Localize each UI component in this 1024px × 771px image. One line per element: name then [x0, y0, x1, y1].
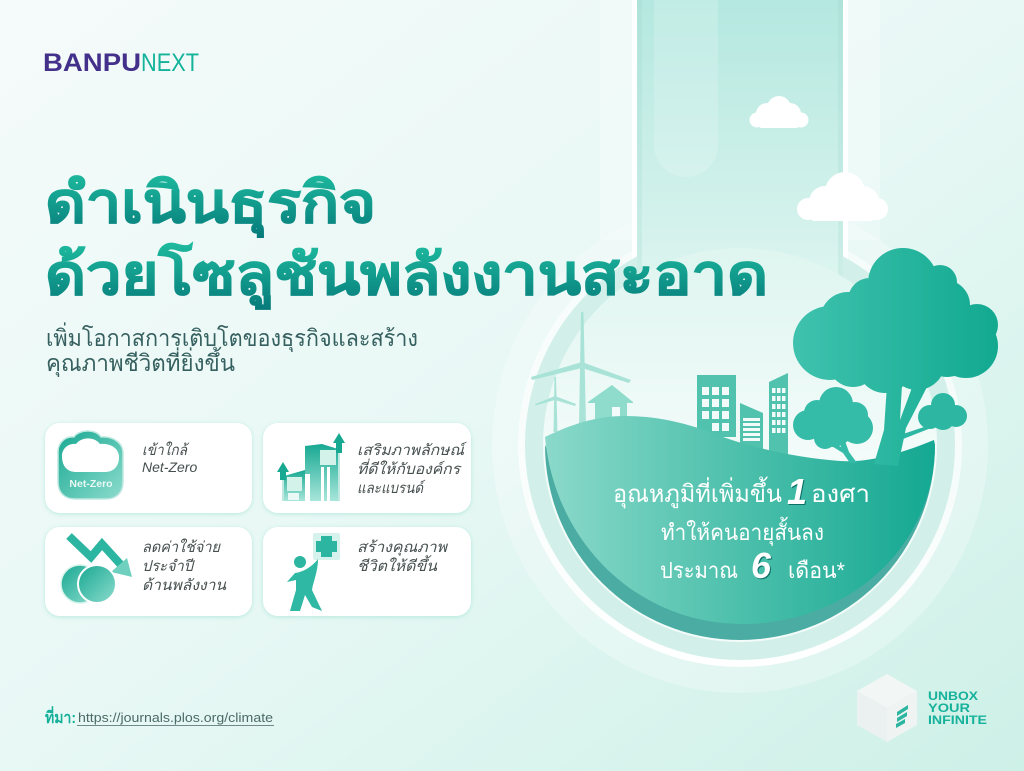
line 3: ประมาณ [660, 558, 738, 583]
text [142, 538, 227, 594]
cloud large [797, 172, 888, 221]
text: ด้านพลังงาน [142, 577, 227, 594]
line 1: 1 [787, 471, 807, 512]
flask: outer glow [492, 0, 988, 693]
flask: pale inner wall [525, 0, 955, 660]
icon: cube [857, 674, 917, 742]
text: ชีวิตให้ดีขึ้น [357, 555, 438, 575]
panel: quality of life [263, 527, 471, 616]
line 3 [660, 545, 845, 587]
tagline: UNBOX [928, 689, 978, 703]
text [357, 441, 467, 497]
hill shadow [545, 445, 935, 640]
icon: person with plus [287, 533, 340, 611]
panel: brand image [263, 423, 471, 513]
line 1 [613, 471, 870, 513]
big tree [793, 248, 998, 466]
text: และแบรนด์ [357, 479, 426, 497]
text: ที่ดีให้กับองค์กร [357, 458, 462, 478]
flask: bulb interior [543, 248, 937, 642]
line 3: เดือน* [788, 558, 845, 583]
icon: falling arrow and coins [61, 536, 132, 603]
unbox badge [857, 674, 987, 742]
icon: buildings with arrows [277, 433, 345, 501]
tagline: YOUR [928, 701, 970, 715]
subtitle [46, 322, 418, 377]
flask: neck strip [637, 0, 843, 285]
small tree right [903, 393, 967, 439]
title: ด้วยโซลูชันพลังงานสะอาด [45, 242, 768, 310]
cloud small [750, 96, 808, 128]
flask illustration [492, 0, 998, 693]
subtitle: คุณภาพชีวิตที่ยิ่งขึ้น [46, 347, 235, 377]
text: เข้าใกล้ [142, 441, 190, 459]
panel: energy cost [45, 527, 252, 616]
flask: white neck wall [632, 0, 848, 262]
wind turbines [531, 312, 631, 432]
line 1: องศา [811, 481, 870, 508]
text: ประจำปี [142, 558, 195, 575]
icon: net-zero cloud [58, 431, 123, 499]
title: ดำเนินธุรกิจ [45, 171, 376, 238]
source: https://journals.plos.org/climate [78, 710, 273, 725]
source [45, 706, 274, 727]
tagline [928, 689, 987, 727]
text [357, 539, 448, 575]
tagline: INFINITE [928, 713, 987, 727]
flask: neck interior [642, 0, 838, 285]
logo: BANPU [43, 49, 141, 77]
small tree left [793, 387, 873, 463]
line 3: 6 [752, 546, 773, 587]
icon: net-zero cloud: Net-Zero [69, 478, 113, 490]
source: ที่มา: [45, 706, 76, 727]
text: สร้างคุณภาพ [357, 539, 448, 556]
line 3: 6 [751, 545, 772, 586]
text [142, 441, 197, 475]
line 2: ทำให้คนอายุสั้นลง [661, 517, 824, 546]
hill face [545, 416, 935, 624]
line 1: 1 [788, 472, 808, 513]
text: Net-Zero [142, 459, 197, 475]
logo [43, 49, 199, 77]
temperature statement [613, 471, 870, 587]
logo: NEXT [141, 49, 199, 77]
text: เสริมภาพลักษณ์ [357, 441, 467, 459]
line 1: อุณหภูมิที่เพิ่มขึ้น [613, 476, 782, 509]
flask: white ring [518, 223, 962, 667]
flask: neck capsule [654, 0, 718, 177]
text: ลดค่าใช้จ่าย [142, 538, 221, 556]
buildings [697, 373, 788, 455]
subtitle: เพิ่มโอกาสการเติบโตของธุรกิจและสร้าง [46, 322, 418, 352]
house [588, 385, 633, 428]
panel: net-zero [45, 423, 252, 513]
title [45, 171, 768, 310]
